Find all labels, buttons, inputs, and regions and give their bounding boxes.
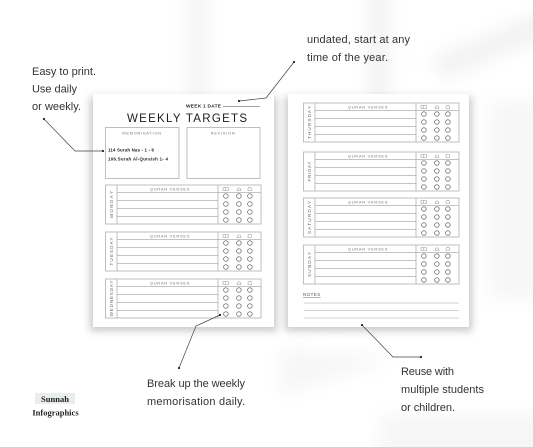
panel: monday xyxy=(106,185,261,224)
panel: tuesday: TUESDAY xyxy=(109,238,114,266)
callout: reuse: or children. xyxy=(401,402,455,414)
arrow: undated xyxy=(238,61,295,102)
logo: Sunnah xyxy=(41,394,69,404)
panel: revision xyxy=(187,128,260,178)
callout: easy to print: Easy to print. xyxy=(32,66,96,78)
panel: wednesday xyxy=(106,279,261,318)
panel: saturday: QURAN VERSES xyxy=(348,200,388,204)
notes xyxy=(303,292,459,318)
callout: easy to print: or weekly. xyxy=(32,101,81,113)
panel: tuesday xyxy=(106,232,261,271)
panel: friday xyxy=(304,152,459,191)
panel: sunday: SUNDAY xyxy=(307,252,312,277)
panel: friday: QURAN VERSES xyxy=(348,154,388,158)
week date label xyxy=(186,104,260,110)
panel: saturday: SATURDAY xyxy=(307,201,312,234)
panel: memorisation: MEMORISATION xyxy=(122,130,162,136)
panel: revision: REVISION xyxy=(211,130,235,136)
callout: undated: undated, start at any xyxy=(307,34,410,46)
callout: reuse: multiple students xyxy=(401,384,484,396)
panel: thursday: THURSDAY xyxy=(307,106,312,139)
notes: NOTES xyxy=(303,292,321,297)
panel: monday: MONDAY xyxy=(109,191,114,218)
panel: memorisation xyxy=(106,128,179,178)
logo xyxy=(32,393,79,418)
callout: reuse: Reuse with xyxy=(401,366,454,378)
panel: monday: QURAN VERSES xyxy=(150,186,190,192)
panel: thursday xyxy=(304,103,459,142)
panel: saturday xyxy=(304,198,459,237)
right page xyxy=(285,94,472,331)
panel: memorisation: 106.Surah Al-Quraish 1- 4 xyxy=(108,156,169,162)
callout: undated: time of the year. xyxy=(307,52,388,64)
panel: wednesday: WEDNESDAY xyxy=(109,280,114,316)
panel: thursday: QURAN VERSES xyxy=(348,104,388,110)
panel: wednesday: QURAN VERSES xyxy=(150,280,190,286)
arrow: reuse xyxy=(361,324,422,358)
panel: friday: FRIDAY xyxy=(307,162,312,182)
left page xyxy=(90,94,277,331)
panel: memorisation: 114 Surah Nas - 1 - 6 xyxy=(108,148,155,152)
arrow: easy to print xyxy=(43,118,104,152)
title: WEEKLY TARGETS xyxy=(127,113,247,125)
panel: tuesday: QURAN VERSES xyxy=(150,234,190,238)
callout: break up: Break up the weekly xyxy=(147,378,246,390)
panel: sunday xyxy=(304,245,459,284)
panel: sunday: QURAN VERSES xyxy=(348,246,388,252)
week date label: WEEK 1 DATE xyxy=(186,104,222,110)
callout: easy to print: Use daily xyxy=(32,84,78,96)
arrow: break up xyxy=(178,314,221,369)
logo: Infographics xyxy=(32,408,79,418)
callout: break up: memorisation daily. xyxy=(147,396,245,408)
